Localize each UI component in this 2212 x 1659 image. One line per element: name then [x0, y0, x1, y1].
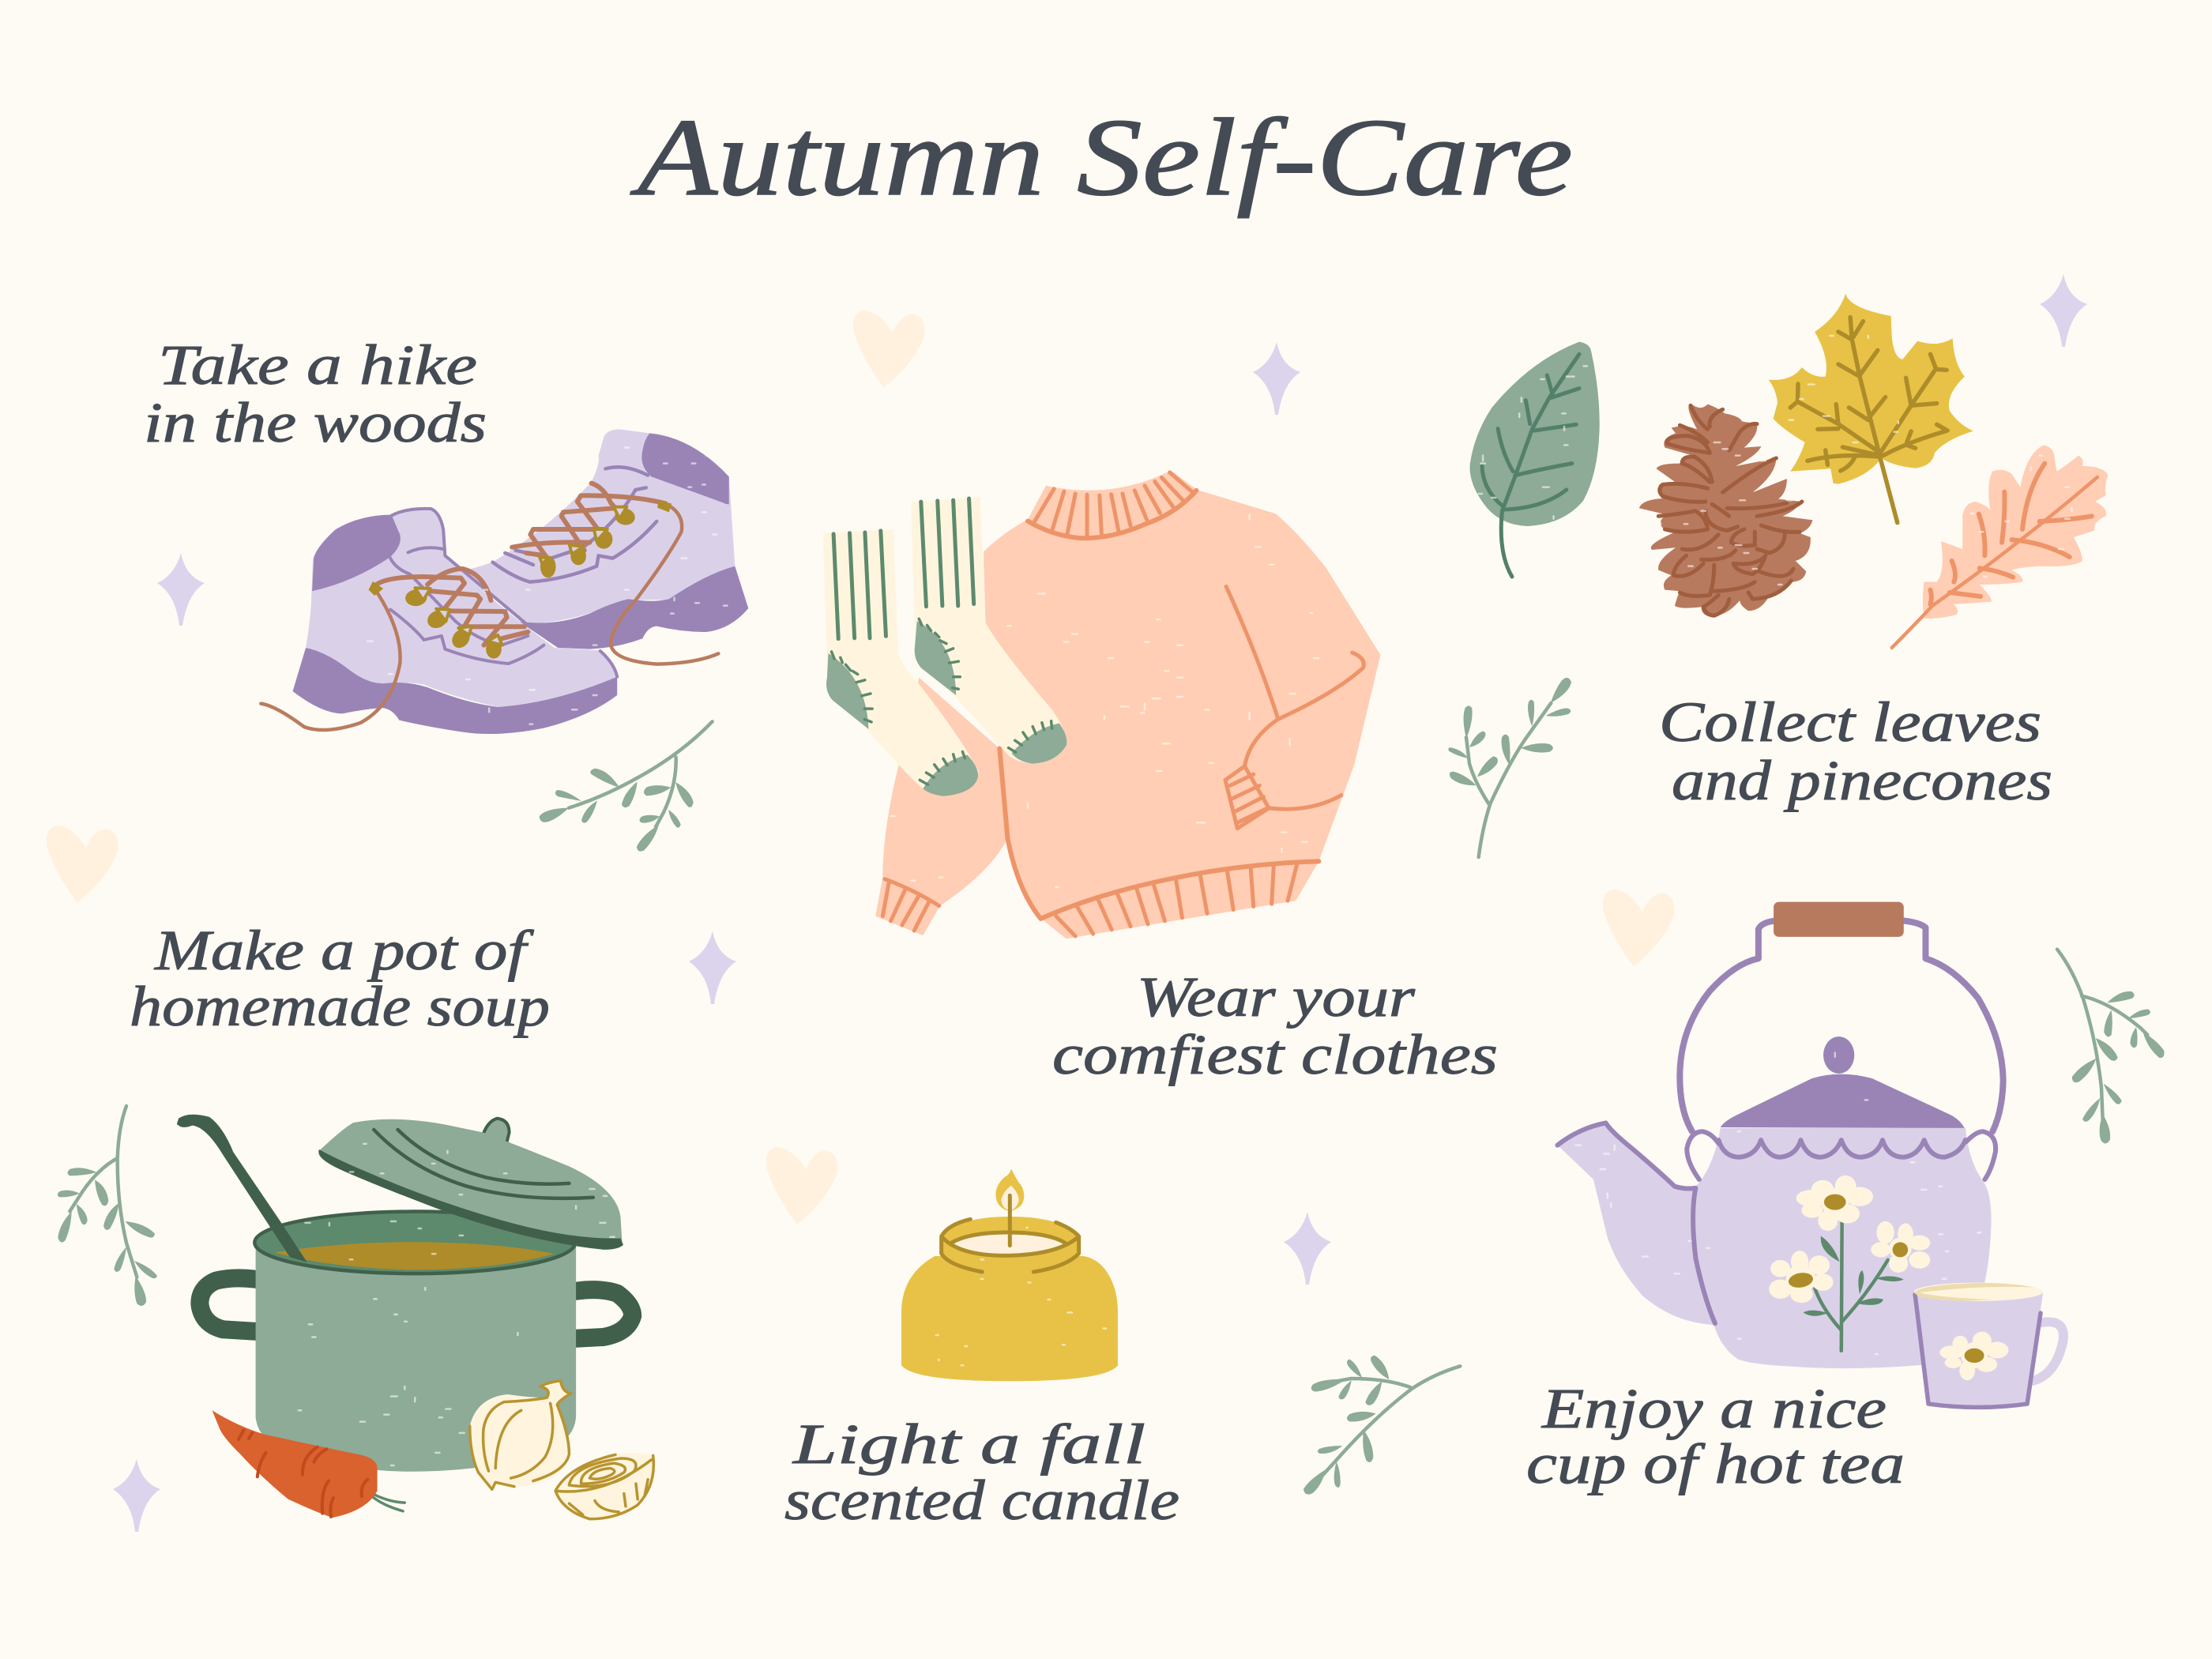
flower left [1769, 1251, 1834, 1303]
illustration: hiking boots [261, 429, 748, 734]
text: candle: scented candle [784, 1469, 1179, 1532]
illustration: candle [901, 1168, 1118, 1381]
text: collect leaves: Collect leaves [1659, 690, 2041, 754]
text: collect leaves [1659, 690, 2052, 812]
text: candle: Light a fall [792, 1413, 1146, 1476]
sparkle: bottom left [113, 1459, 160, 1532]
soup [274, 1242, 554, 1270]
text: take a hike: in the woods [144, 391, 487, 454]
sparkle: by candle [1284, 1212, 1331, 1285]
heart: above candle [766, 1147, 837, 1224]
text: wear your comfiest clothes: Wear your [1137, 965, 1416, 1029]
text: homemade soup: Make a pot of [154, 919, 535, 982]
text: take a hike [144, 333, 487, 454]
text: wear your comfiest clothes [1052, 965, 1498, 1086]
flower right [1871, 1221, 1930, 1273]
pot rim [254, 1212, 575, 1273]
text: tea: cup of hot tea [1526, 1432, 1905, 1495]
sprig: below boots [540, 721, 713, 852]
oak leaf [1892, 445, 2108, 648]
flame [995, 1168, 1024, 1211]
kettle outlines [1557, 1123, 1996, 1323]
spout [1557, 1123, 1717, 1325]
illustration: sweater and socks [823, 471, 1380, 939]
pinecone [1639, 404, 1812, 617]
carrot [213, 1410, 404, 1518]
maple leaf [1769, 294, 1973, 523]
sweater lines [882, 472, 1364, 936]
onion half [555, 1453, 653, 1519]
kettle body [1692, 1128, 1992, 1368]
text: tea [1526, 1377, 1905, 1495]
sprig: left of pot [58, 1106, 157, 1306]
sparkle: by soup label [689, 931, 736, 1004]
illustration: soup pot [177, 1115, 653, 1519]
sprig: beside candle [1304, 1356, 1460, 1495]
text: wear your comfiest clothes: comfiest clothes [1052, 1023, 1498, 1086]
title: Autumn Self-Care [630, 96, 1573, 219]
text: homemade soup [130, 919, 550, 1038]
heart: left [47, 826, 118, 903]
sock right [911, 497, 1066, 764]
kettle bail handle [1680, 902, 2003, 1131]
onion whole [470, 1381, 571, 1489]
wax surface [951, 1234, 1063, 1256]
cup flower [1939, 1332, 2008, 1380]
text: tea: Enjoy a nice [1541, 1377, 1887, 1440]
text: take a hike: Take a hike [158, 333, 477, 397]
sweater sleeve [875, 678, 1006, 935]
sprig: centre right [1448, 678, 1571, 857]
ladle [177, 1115, 307, 1262]
sparkle: top right [2040, 274, 2087, 347]
cup [1914, 1283, 2063, 1407]
sweater body [984, 471, 1380, 939]
text: candle [784, 1413, 1179, 1532]
back boot [456, 429, 748, 664]
kettle lid [1721, 1074, 1965, 1128]
candle lines and wick [942, 1195, 1079, 1272]
front boot [261, 509, 617, 734]
sock left [823, 529, 979, 796]
illustration: leaves and pinecone [1470, 294, 2108, 648]
flower top [1796, 1176, 1873, 1231]
candle rim [941, 1217, 1079, 1272]
text: homemade soup: homemade soup [130, 975, 550, 1038]
illustration: teapot and cup [1557, 902, 2063, 1407]
sparkle: top centre [1253, 342, 1300, 415]
pot lid [318, 1119, 623, 1250]
green leaf [1470, 342, 1600, 577]
heart: beside kettle [1603, 890, 1674, 967]
pot body [256, 1243, 576, 1472]
sprig: right of kettle [2057, 950, 2165, 1143]
lid knob [1823, 1036, 1854, 1074]
pot handles [200, 1278, 633, 1338]
heart: top centre [853, 310, 924, 388]
flower stems [1804, 1217, 1904, 1351]
jar [901, 1256, 1118, 1381]
sparkle: by boots [157, 553, 205, 626]
text: collect leaves: and pinecones [1672, 749, 2052, 812]
